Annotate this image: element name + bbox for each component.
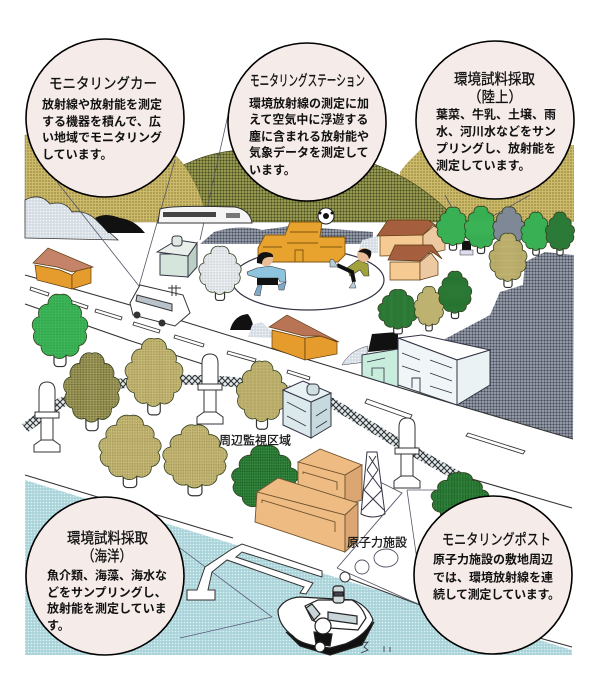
person sampling (460, 232, 473, 255)
callout body: 塵に含まれる放射能や (249, 128, 369, 144)
callout: monitoring post (414, 496, 572, 654)
callout title: 環境試料採取 (67, 530, 148, 547)
nuclear facility buildings (255, 449, 362, 552)
callout body: 放射線や放射能を測定 (42, 96, 162, 112)
label: nuclear facility: 原子力施設 (347, 536, 407, 550)
right gray land (443, 252, 574, 439)
left orange house (33, 248, 93, 289)
site boundary (337, 482, 420, 605)
callout body: 魚介類、海藻、海水な (47, 568, 167, 582)
trees (32, 206, 574, 528)
small green building (362, 349, 398, 387)
callout body: す。 (47, 618, 70, 632)
callout body: います。 (249, 163, 296, 177)
callout title: （海洋） (82, 548, 132, 565)
callout: land sampling (416, 41, 574, 199)
callout body: 水、河川水などをサン (436, 124, 556, 138)
callout title (454, 71, 535, 106)
callout body (47, 568, 167, 632)
clouds and bushes (25, 197, 398, 365)
connector lines (57, 115, 530, 560)
callout title: モニタリングカー (49, 76, 157, 92)
callout body (436, 106, 556, 172)
office building (398, 335, 490, 405)
playground oval (232, 250, 384, 310)
thin lines in the sea (180, 548, 272, 638)
fence (25, 380, 465, 480)
pier (187, 544, 350, 600)
sea (25, 480, 572, 655)
marks on the sea (361, 642, 390, 653)
player right (330, 248, 371, 288)
monitoring station near fence (283, 381, 331, 438)
monitoring car (130, 285, 190, 326)
callout body (42, 96, 162, 162)
callout body: 測定しています。 (436, 158, 530, 172)
callout: sea sampling (26, 497, 184, 655)
player left (247, 252, 286, 296)
monitoring station building (157, 236, 197, 277)
school (258, 222, 345, 262)
callout body: 環境放射線の測定に加 (249, 96, 369, 110)
callout body: 続して測定しています。 (433, 586, 560, 602)
callout title (67, 530, 148, 565)
callout body (249, 96, 369, 177)
callout body: では、環境放射線を連 (433, 570, 553, 584)
roads (25, 275, 573, 647)
callout body: 葉菜、牛乳、土壌、雨 (436, 106, 556, 122)
lattice tower (361, 452, 385, 517)
callout body: する機器を積んで、広 (42, 114, 161, 128)
callout title: （陸上） (468, 89, 522, 106)
train (158, 206, 252, 223)
right houses (377, 220, 448, 280)
monitoring posts (34, 354, 420, 488)
callout body: どをサンプリングし、 (47, 584, 167, 600)
callout: monitoring car (26, 39, 184, 197)
ship (278, 586, 374, 655)
callout: monitoring station (228, 43, 386, 201)
callout title: モニタリングポスト (442, 532, 551, 548)
callout body: い地域でモニタリング (42, 130, 162, 144)
callout body: しています。 (42, 148, 112, 162)
callout title: 環境試料採取 (454, 71, 535, 88)
callout body: 気象データを測定して (249, 144, 369, 160)
callout body: 放射能を測定していま (47, 600, 167, 616)
callout body: えて空気中に浮遊する (249, 112, 368, 126)
label: surveillance area: 周辺監視区域 (219, 432, 291, 448)
callout body: プリングし、放射能を (436, 140, 556, 156)
center orange house (269, 315, 339, 360)
callout body (433, 552, 560, 602)
callout title: モニタリングステーション (250, 72, 365, 90)
callout body: 原子力施設の敷地周辺 (433, 552, 553, 566)
soccer ball (318, 208, 334, 224)
hills (25, 130, 574, 222)
